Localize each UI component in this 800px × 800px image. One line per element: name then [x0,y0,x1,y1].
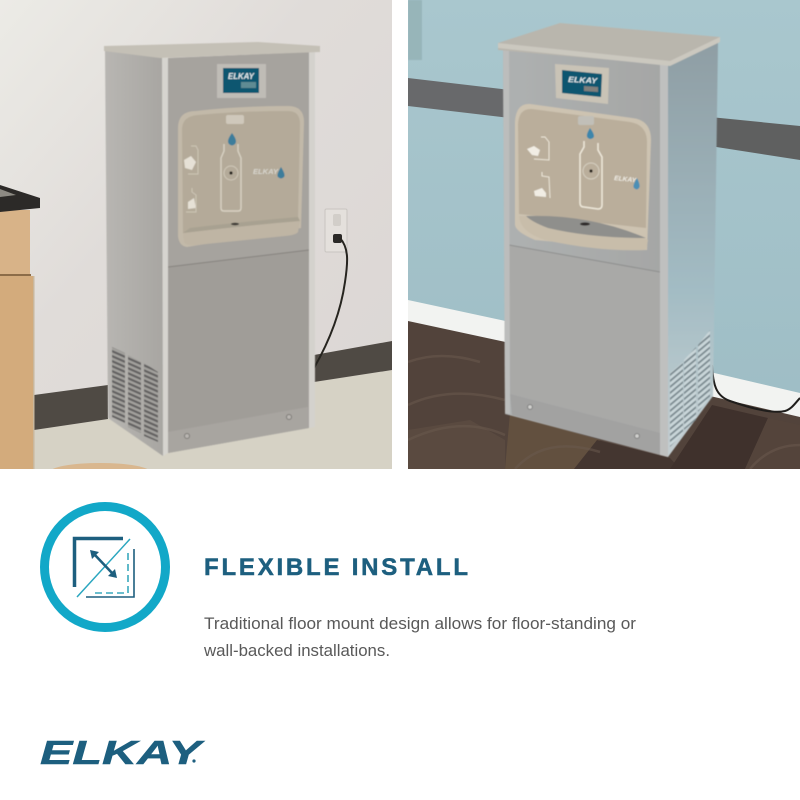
wall [408,0,800,393]
bottle refill icon [188,198,196,209]
kick plate [510,394,660,455]
body text [203,615,637,660]
rail right [710,117,800,160]
plant shadow [408,0,422,60]
logo: Elkay: ELKAY [40,734,205,771]
black countertop [0,185,40,212]
display panel [555,64,609,104]
hand icon [184,156,196,170]
photo: unit in a blue room with dark wood floor [408,0,800,469]
baseboard right [314,341,392,382]
heading: FLEXIBLE INSTALL [204,554,468,581]
lower front panel [509,245,660,433]
body text: Traditional floor mount design allows for floor-standing or [204,615,637,633]
lower front panel [168,250,309,432]
elkay mark: ELKAY [614,175,637,184]
corner trim [162,58,168,456]
elkay mark: ELKAY [253,169,279,176]
bottle refill icon [534,188,546,197]
right trim [309,51,315,428]
rug edge [53,463,147,469]
bottle outline [221,144,241,211]
left trim [503,49,510,414]
diagonal teal line [77,539,130,597]
cabinet side [668,42,718,457]
rail left [408,78,510,118]
side vents [670,330,710,447]
floor [34,370,392,469]
display panel: ELKAY [568,75,598,86]
power cord [712,365,800,412]
bottle filler recess [515,104,651,250]
power cord [314,238,347,368]
corner trim [660,63,668,457]
outer bracket dark [74,538,123,587]
cabinet front [503,49,668,457]
drip tray [183,217,300,245]
drip tray [519,216,648,250]
water drop icon [587,128,594,139]
water cooler [498,23,720,457]
wall outlet [325,209,347,252]
double arrow [90,550,117,578]
photo: floor-standing unit against a beige wall [0,0,392,481]
baseboard left [34,385,108,430]
baseboard right [710,372,800,417]
cabinet front [168,52,309,453]
water drop icon [228,133,236,146]
bottle outline [580,141,602,209]
dashed teal bracket [92,553,128,593]
top cap [498,23,720,65]
top cap [104,42,320,58]
floor planks and grain [408,356,800,469]
cabinet side [105,50,163,456]
bottle filler recess [178,106,304,247]
side vents [112,347,158,442]
wall [0,0,392,469]
wood cabinet [0,210,34,469]
display panel: ELKAY [228,72,255,81]
display panel [217,64,266,98]
hand icon [527,146,540,156]
water cooler [104,42,320,456]
icon: flexible install circle [44,506,166,628]
logo: Elkay [40,734,205,771]
baseboard left [408,300,510,343]
kick plate [184,414,292,440]
body text: wall-backed installations. [203,642,390,660]
floor [408,320,800,469]
lower bracket dark [86,549,134,597]
